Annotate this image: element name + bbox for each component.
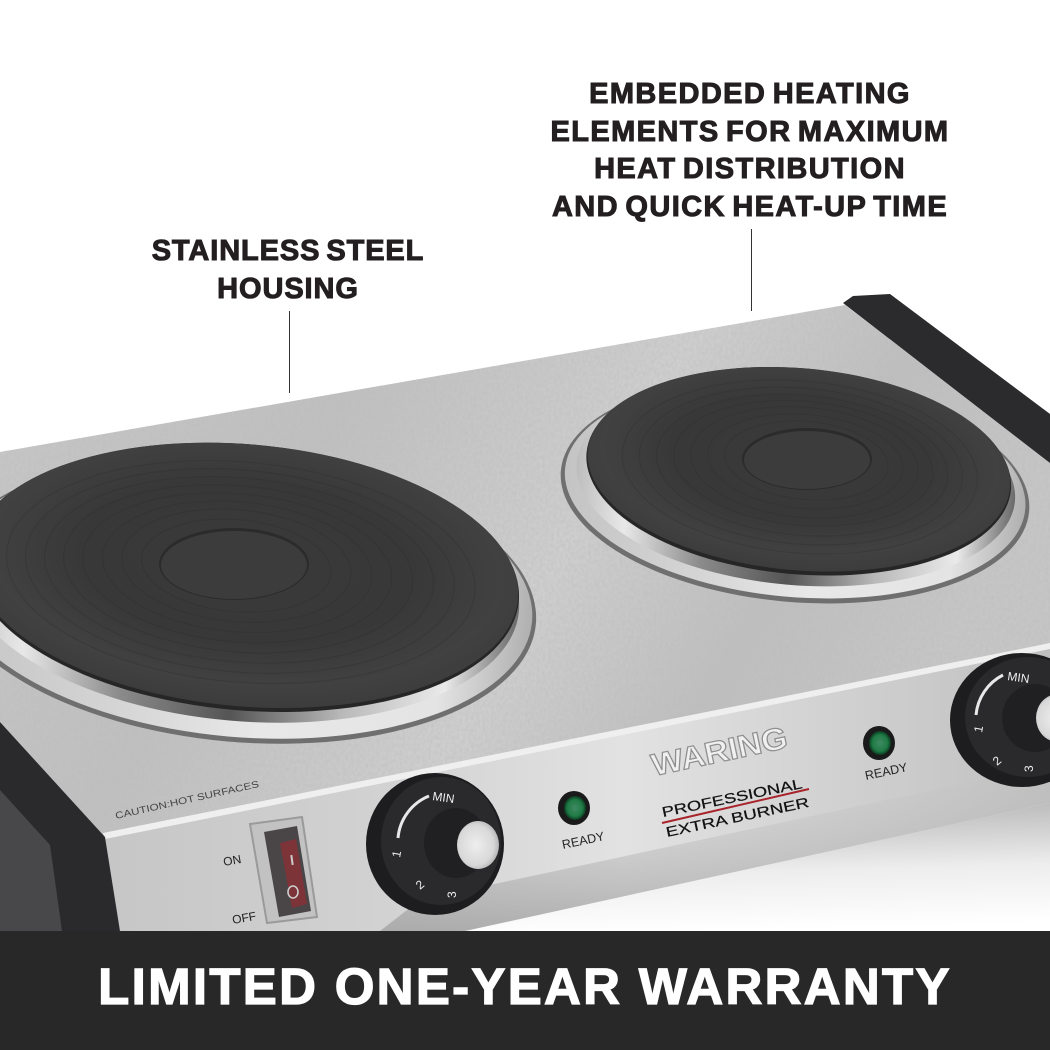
top surface xyxy=(0,305,1050,837)
dial right: MIN xyxy=(1007,669,1030,686)
brand logo: WARING xyxy=(648,720,790,783)
callout: embedded heating elements: EMBEDDED HEATING xyxy=(589,78,911,110)
dial right xyxy=(950,653,1050,787)
dial left: 1 xyxy=(389,849,404,859)
callout: stainless steel housing: STAINLESS STEEL xyxy=(152,235,424,267)
ready light left xyxy=(558,791,606,852)
front edge highlight xyxy=(103,643,1050,839)
callout line: housing xyxy=(289,311,290,393)
caution text: CAUTION:HOT SURFACES xyxy=(114,779,260,822)
brand logo: EXTRA BURNER xyxy=(664,794,810,840)
callout: embedded heating elements: AND QUICK HEAT-UP TIME xyxy=(552,190,948,222)
callout: embedded heating elements xyxy=(550,78,950,222)
callout line: heating elements xyxy=(751,229,752,311)
brushed steel texture xyxy=(0,305,1050,837)
callout: embedded heating elements: HEAT DISTRIBUTION xyxy=(594,153,906,185)
front panel xyxy=(105,647,1050,931)
dial right: 1 xyxy=(971,724,986,734)
left handle xyxy=(0,722,120,931)
callout: stainless steel housing xyxy=(152,235,424,304)
dial left: MIN xyxy=(432,789,455,806)
warranty banner xyxy=(0,931,1050,1050)
ready light right xyxy=(863,726,909,783)
front panel lower chamfer xyxy=(380,765,1050,931)
ready light left: READY xyxy=(561,829,606,852)
dial left: 3 xyxy=(445,891,459,898)
power switch xyxy=(222,817,317,927)
power switch: ON xyxy=(222,852,242,869)
warranty banner: LIMITED ONE-YEAR WARRANTY xyxy=(98,958,952,1015)
shadow below appliance xyxy=(465,803,1050,931)
right handle xyxy=(843,294,1050,463)
right burner xyxy=(551,348,1040,622)
dial right: 2 xyxy=(990,753,1004,768)
left burner xyxy=(0,419,549,767)
brand logo: PROFESSIONAL xyxy=(660,775,804,820)
ready light right: READY xyxy=(864,760,909,783)
dial left xyxy=(366,773,504,915)
brand logo xyxy=(648,720,810,840)
dial right: 3 xyxy=(1022,765,1036,772)
dial left: 2 xyxy=(413,877,427,892)
callout: embedded heating elements: ELEMENTS FOR MAXIMUM xyxy=(550,116,950,148)
power switch: OFF xyxy=(231,909,257,927)
callout: stainless steel housing: HOUSING xyxy=(217,272,359,304)
